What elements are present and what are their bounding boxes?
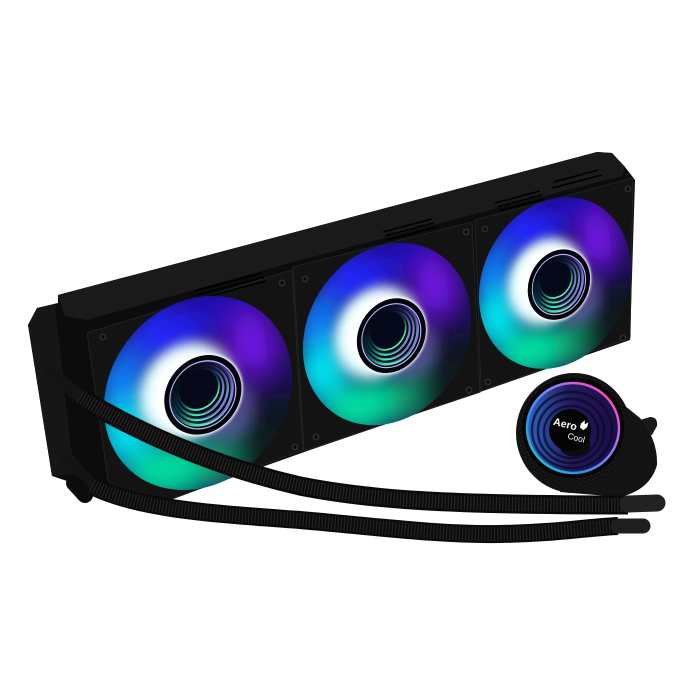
centre cylinder — [550, 425, 590, 457]
fan left — [89, 267, 311, 514]
vents — [195, 170, 602, 299]
radiator silhouette — [28, 152, 635, 504]
centre cap — [549, 409, 591, 451]
mirror rings — [532, 392, 612, 468]
rubber end pump — [618, 518, 643, 534]
sleeve — [80, 397, 628, 505]
sleeve — [92, 486, 618, 534]
logo word Cool: Cool — [567, 431, 586, 445]
fan right — [467, 172, 647, 390]
radiator assembly — [28, 152, 635, 504]
screws — [100, 186, 632, 450]
sleeve braid — [92, 486, 618, 534]
fan middle — [289, 215, 489, 449]
rubber end radiator — [50, 372, 82, 398]
logo mark — [579, 420, 589, 431]
carbon cap — [516, 373, 632, 493]
logo — [550, 413, 589, 445]
rubber end pump — [628, 503, 657, 504]
fan frame right — [475, 178, 633, 391]
radiator top plate — [58, 152, 625, 320]
end tank — [28, 304, 75, 476]
rubber end radiator — [67, 458, 94, 488]
pump body — [516, 373, 657, 497]
mirror ring — [522, 378, 624, 478]
mounting ear — [640, 417, 657, 438]
sleeve braid — [80, 397, 628, 505]
lower tube — [67, 458, 643, 534]
logo word Aero: Aero — [552, 416, 578, 433]
pump housing — [560, 378, 657, 497]
fan frame middle — [293, 222, 480, 451]
mirror — [527, 383, 619, 473]
fan frame left — [87, 270, 303, 503]
upper tube — [50, 372, 657, 505]
second rubber stub — [74, 483, 85, 495]
